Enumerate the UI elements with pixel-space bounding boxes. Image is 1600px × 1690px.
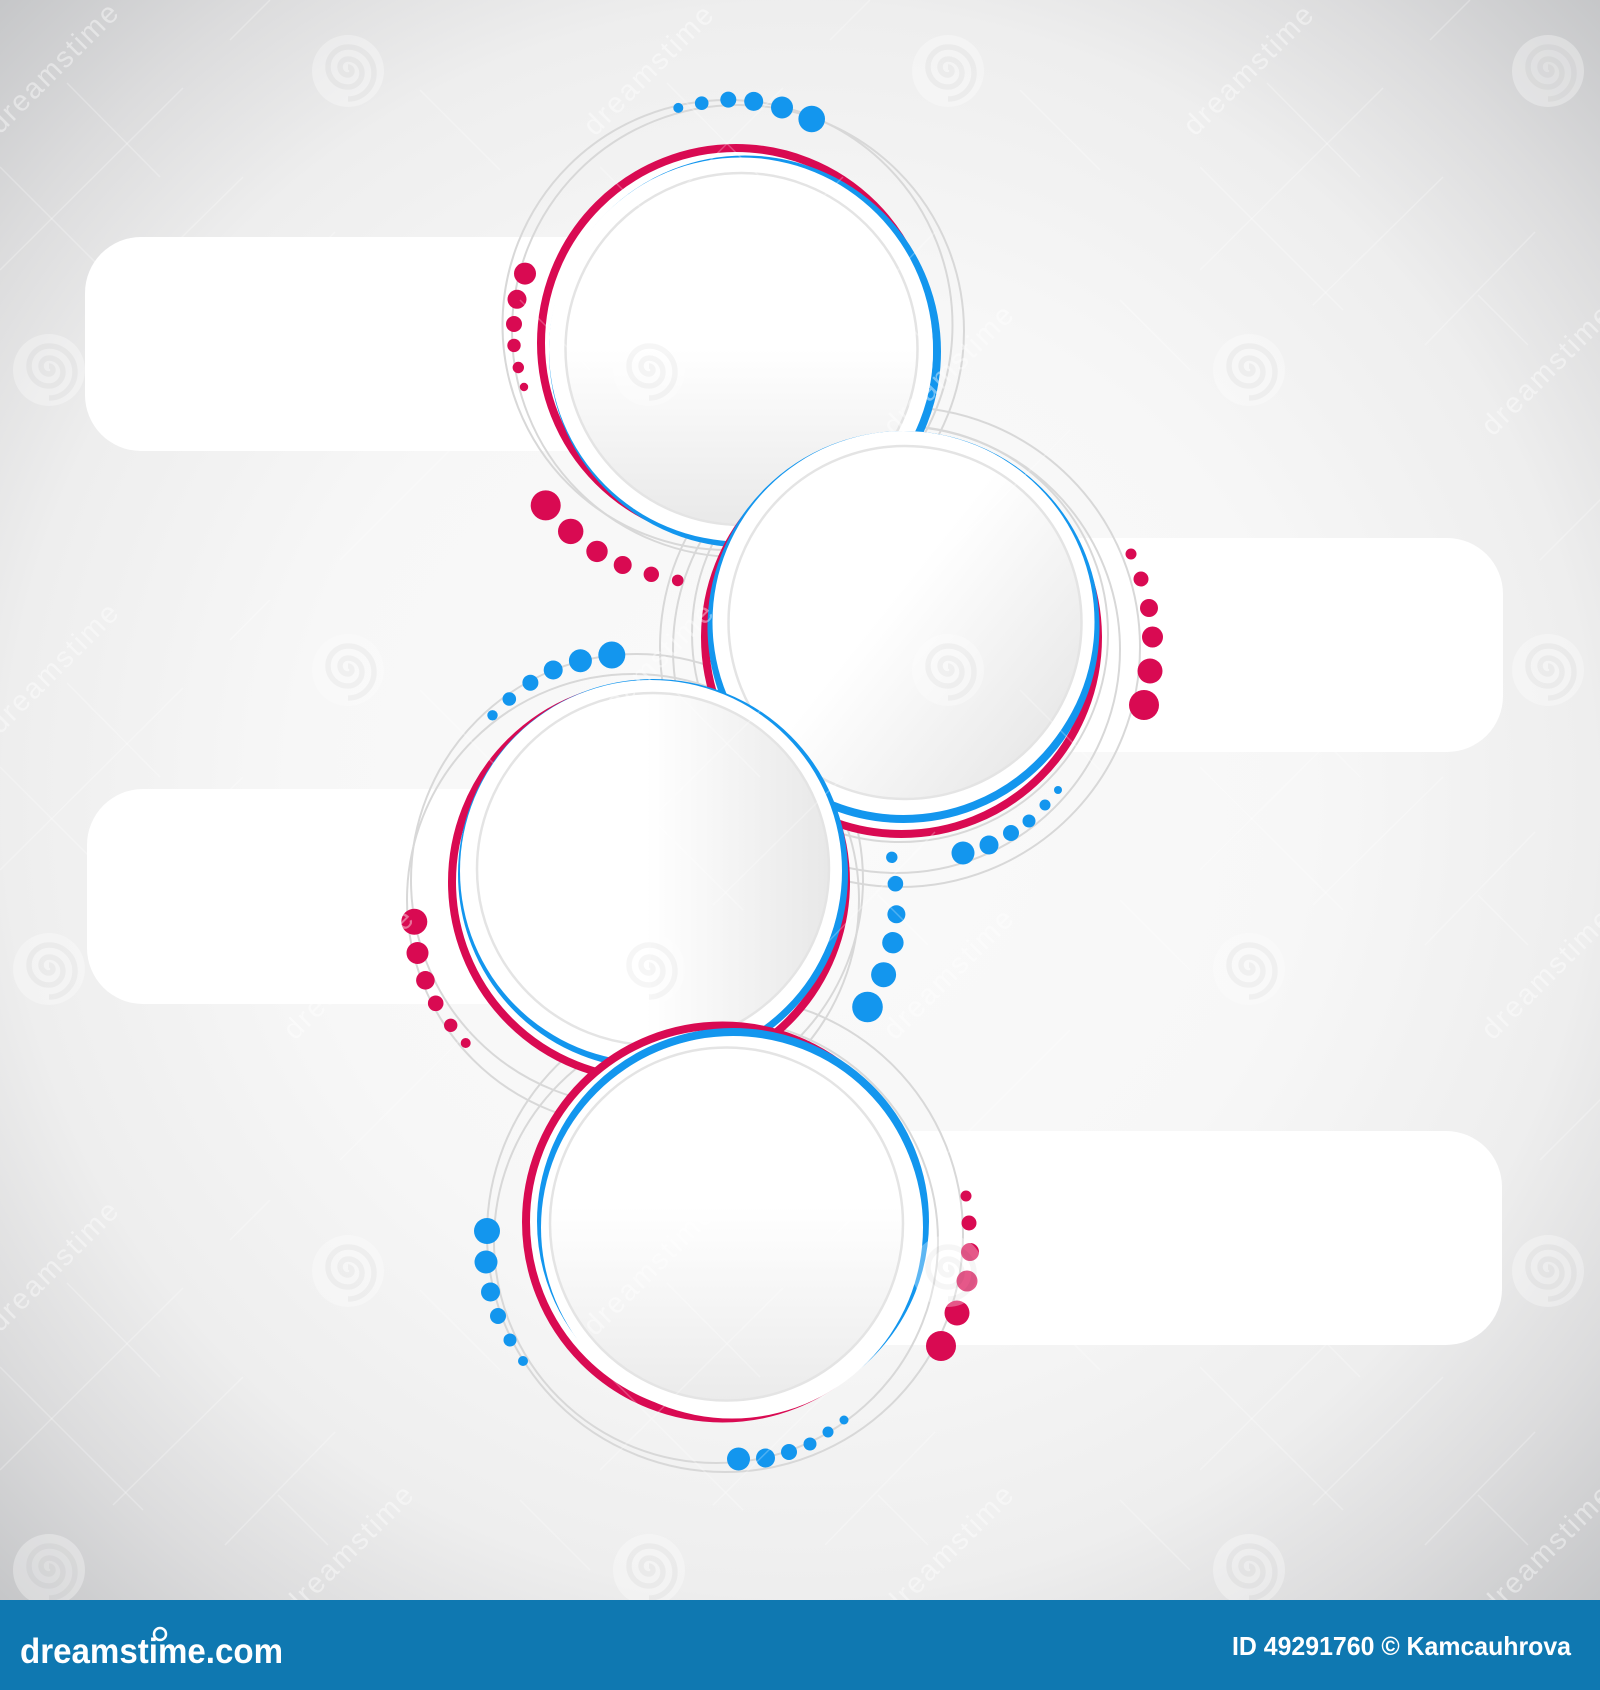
inner gradient disc — [566, 173, 918, 525]
watermark text: dreamstime — [877, 1479, 1020, 1622]
panel: upper-right label box — [950, 538, 1503, 752]
watermark text: dreamstime — [277, 1479, 420, 1622]
white disc — [549, 158, 933, 542]
dots: circle 4 lower blue arc — [727, 1416, 848, 1470]
watermark text: dreamstime — [577, 0, 720, 142]
watermark text: dreamstime — [1177, 599, 1320, 742]
watermark text: dreamstime — [577, 597, 720, 740]
dots: circle 1 lower red arc — [531, 490, 684, 586]
dots: circle 3 left red arc — [401, 909, 471, 1048]
footer logo text: dreamstime.com — [20, 1632, 283, 1671]
circle 2: right — [705, 431, 1098, 834]
blue ring — [553, 160, 937, 544]
dots: circle 3 top blue arc — [487, 642, 625, 720]
white disc — [460, 680, 842, 1062]
dots: circle 1 left red arc — [506, 263, 536, 391]
watermark text: dreamstime — [1177, 0, 1320, 142]
inner gradient disc — [550, 1048, 903, 1400]
footer bar — [0, 1600, 1600, 1690]
watermark text: dreamstime — [877, 299, 1020, 442]
panel: top-left label box — [85, 237, 645, 451]
panel: middle-left label box — [87, 789, 587, 1004]
dots: circle 2 right red arc — [1126, 548, 1163, 720]
watermark text: dreamstime — [877, 903, 1020, 1046]
dots: circle 2 lower blue arc — [952, 786, 1062, 864]
thin outer rings behind all circles — [407, 100, 1140, 1472]
white disc — [712, 431, 1094, 813]
watermark text: dreamstime — [277, 303, 420, 446]
watermark text: dreamstime — [277, 903, 420, 1046]
watermark text: dreamstime — [577, 1199, 720, 1342]
blue ring — [712, 435, 1096, 819]
red ring — [705, 441, 1098, 834]
blue ring — [462, 682, 844, 1066]
circle 1: top — [541, 148, 937, 544]
dots: circle 4 right red arc — [926, 1190, 979, 1361]
watermark text: dreamstime — [1177, 1197, 1320, 1340]
red ring — [541, 148, 931, 538]
white disc — [541, 1036, 923, 1418]
inner gradient disc — [477, 693, 829, 1045]
inner gradient disc — [728, 446, 1082, 799]
red ring — [452, 685, 846, 1079]
dots: circle 1 top blue arc — [673, 92, 825, 132]
blue ring — [541, 1032, 925, 1411]
dots: circle 4 left blue arc — [474, 1218, 528, 1366]
dots: circle 3 right blue arc — [852, 852, 905, 1022]
panel: lower-right label box — [885, 1131, 1502, 1345]
circle 4: bottom — [526, 1026, 925, 1418]
footer image id and credit: ID 49291760 © Kamcauhrova — [1232, 1631, 1572, 1661]
circle 3: left — [452, 680, 846, 1079]
red ring — [526, 1026, 919, 1418]
footer logo spiral icon — [154, 1628, 166, 1640]
